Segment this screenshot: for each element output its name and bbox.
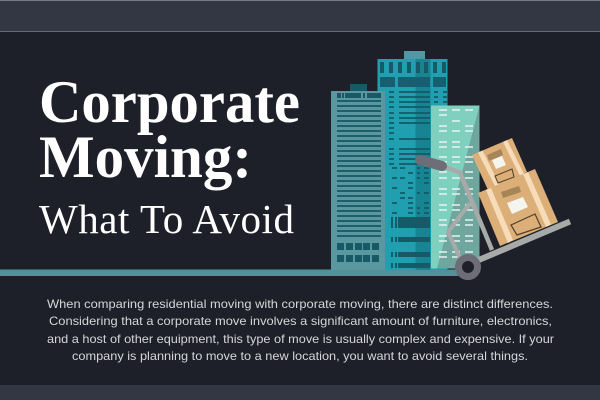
top band: [0, 0, 600, 32]
upper box: [472, 138, 527, 190]
intro paragraph: company is planning to move to a new location, you want to avoid several things.: [72, 349, 528, 363]
hand truck: [420, 160, 570, 276]
intro paragraph: Considering that a corporate move involves a significant amount of furniture, electronics,: [49, 314, 552, 328]
bottom band: [0, 385, 600, 400]
title: Corporate: [39, 69, 300, 135]
title: Moving:: [39, 124, 252, 190]
building: left grey-teal tower: [331, 84, 385, 270]
intro paragraph: and a host of other equipment, this type of move is usually complex and expensive. If your: [47, 332, 554, 346]
intro paragraph: [47, 297, 554, 363]
building: centre teal tower: [378, 51, 448, 270]
building: right light tower: [431, 106, 480, 268]
lower box: [478, 169, 558, 246]
intro paragraph: When comparing residential moving with corporate moving, there are distinct differences.: [47, 297, 553, 311]
ground line: [0, 270, 458, 276]
title: What To Avoid: [39, 196, 294, 242]
title: [39, 69, 300, 242]
